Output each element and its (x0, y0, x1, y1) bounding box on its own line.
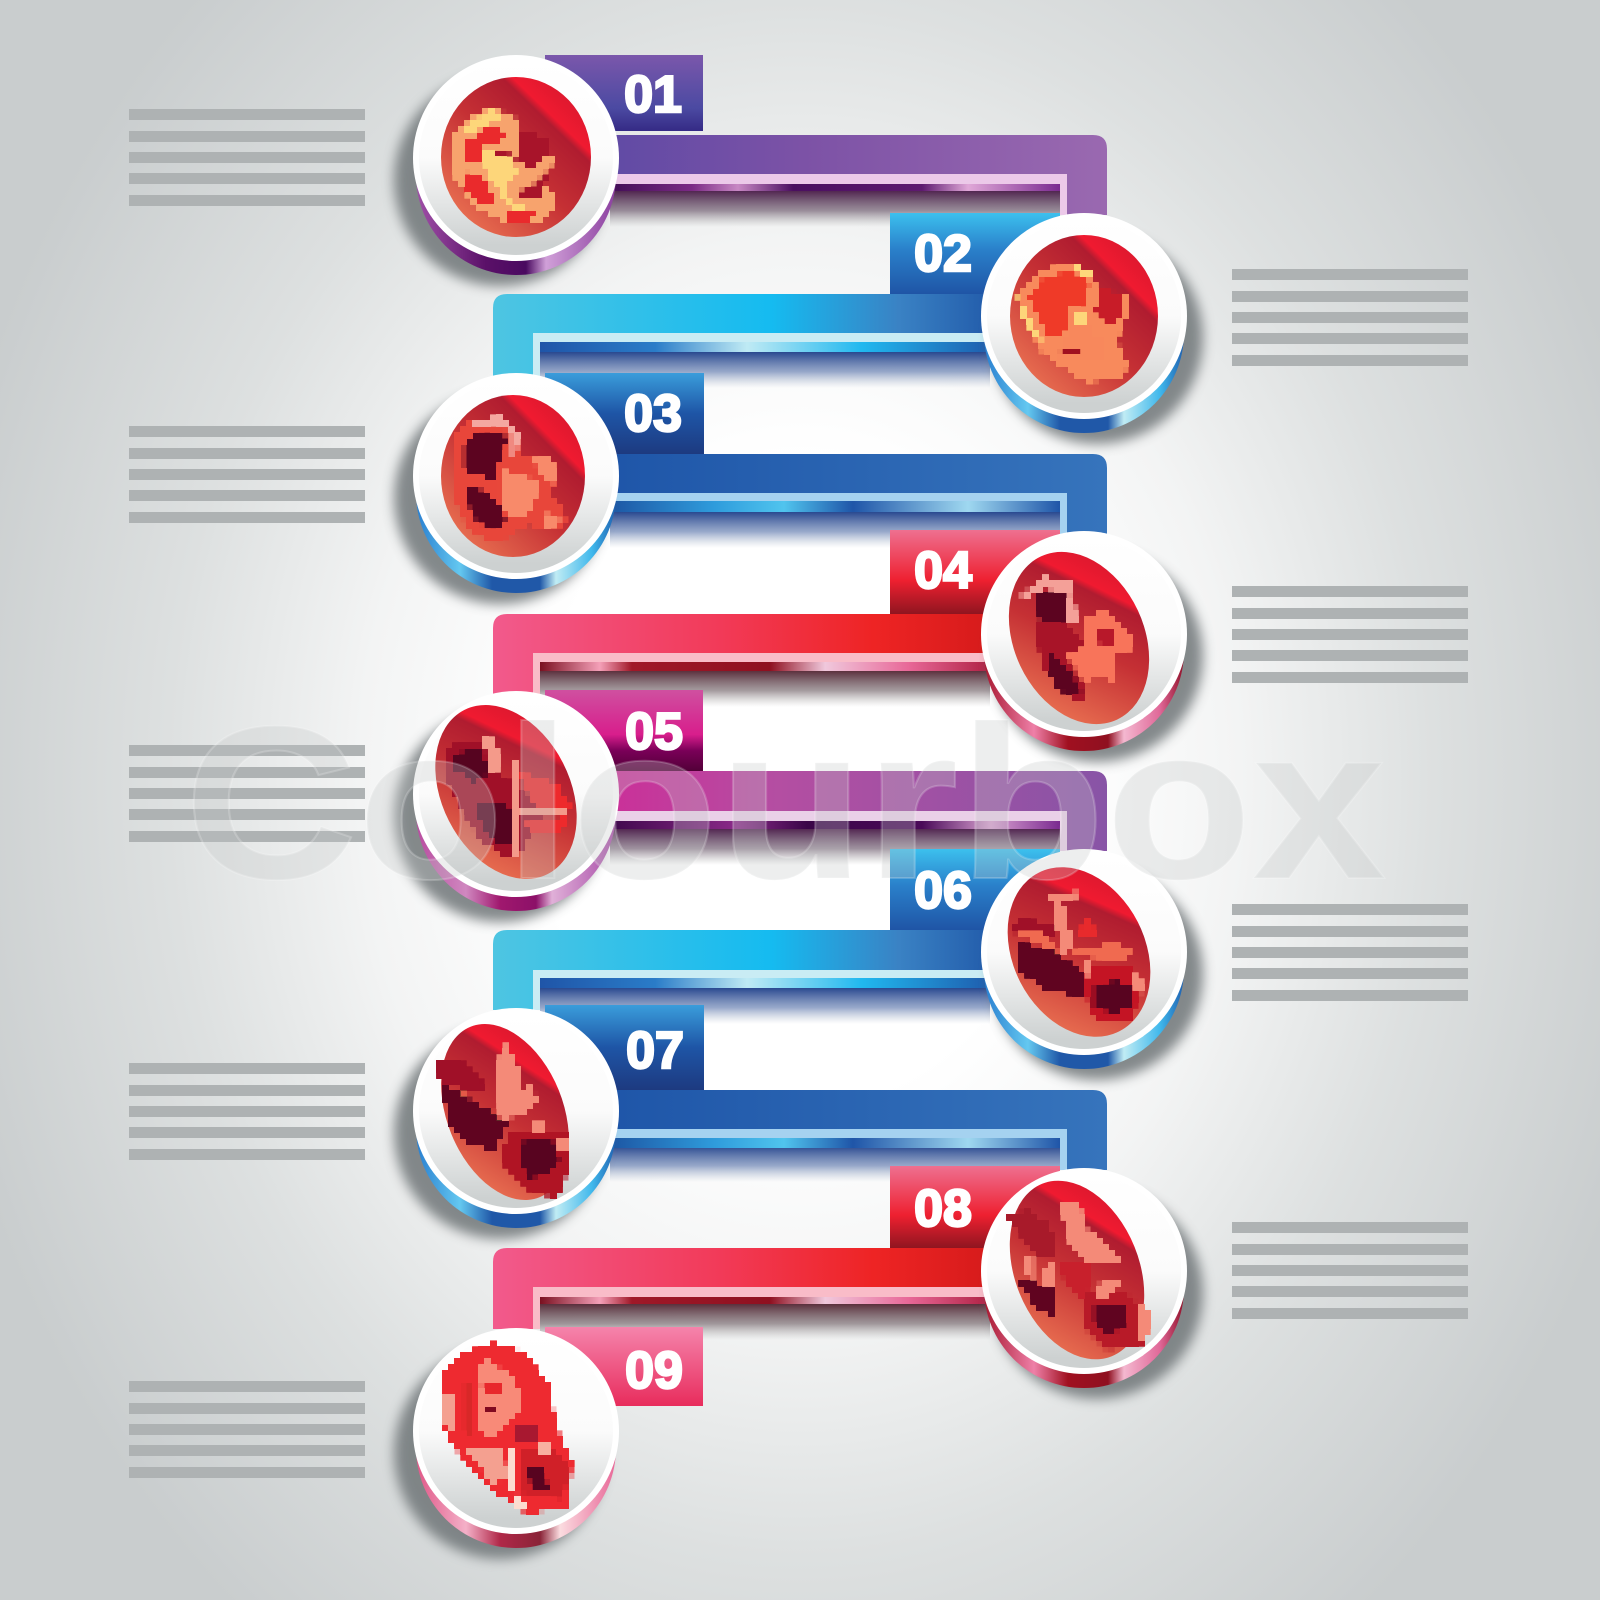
number tab 03: 03 (624, 385, 682, 443)
step 03 (394, 360, 1107, 660)
fetus 03 (400, 360, 700, 660)
text placeholder: step 09 (129, 1381, 365, 1478)
number tab 04: 04 (914, 542, 972, 600)
medallion 05 (380, 640, 680, 940)
number tab 05: 05 (625, 703, 683, 761)
number tab 08: 08 (914, 1180, 972, 1238)
text placeholder: step 05 (129, 745, 365, 842)
number tab 04 (890, 530, 1060, 614)
fetus 05 (380, 640, 680, 940)
fetus 02 (840, 120, 1158, 420)
connector band 05 (600, 771, 1107, 865)
step 04 (493, 520, 1203, 820)
text placeholder: step 02 (1232, 269, 1468, 366)
connector band 01 (600, 135, 1107, 227)
watermark: Colourbox (184, 682, 1386, 925)
fetus 09 (400, 1310, 700, 1600)
step 05 (380, 640, 1107, 940)
medallion 08 (880, 1160, 1203, 1460)
number tab 02 (890, 213, 1060, 294)
fetus 06 (880, 840, 1180, 1140)
fetus 07 (400, 1000, 700, 1300)
number tab 08 (890, 1166, 1060, 1248)
number tab 06 (890, 849, 1060, 930)
medallion 03 (394, 360, 700, 660)
number tab 06: 06 (914, 862, 972, 920)
number tab 02: 02 (914, 225, 972, 283)
number tab 09: 09 (625, 1342, 683, 1400)
fetus 08 (880, 1160, 1180, 1460)
number tab 07: 07 (626, 1022, 684, 1080)
text placeholder: step 07 (129, 1063, 365, 1160)
connector band 02 (493, 294, 1000, 388)
number tab 03 (545, 373, 704, 454)
connector band 07 (600, 1090, 1107, 1182)
medallion 01 (380, 30, 680, 330)
number tab 07 (545, 1005, 704, 1090)
connector band 08 (493, 1248, 1000, 1340)
medallion 07 (394, 1000, 700, 1300)
number tab 05 (545, 690, 703, 771)
step 06 (493, 840, 1203, 1140)
number tab 01 (545, 55, 703, 131)
medallion 02 (840, 120, 1203, 444)
number tab 09 (545, 1327, 703, 1406)
fetus 04 (880, 520, 1180, 820)
text placeholder: step 04 (1232, 586, 1468, 683)
text placeholder: step 03 (129, 426, 365, 523)
step 02 (493, 120, 1203, 444)
step 01 (380, 30, 1107, 330)
fetus 01 (380, 30, 680, 330)
text placeholder: step 08 (1232, 1222, 1468, 1319)
number tab 01: 01 (624, 66, 682, 124)
connector band 06 (493, 930, 1000, 1024)
medallion 09 (394, 1310, 700, 1600)
connector band 03 (600, 454, 1107, 548)
medallion 06 (880, 840, 1203, 1140)
text placeholder: step 06 (1232, 904, 1468, 1001)
step 08 (493, 1160, 1203, 1460)
medallion 04 (880, 520, 1203, 820)
step 07 (394, 1000, 1107, 1300)
step 09 (394, 1310, 703, 1600)
connector band 04 (493, 614, 1000, 707)
text placeholder: step 01 (129, 109, 365, 206)
